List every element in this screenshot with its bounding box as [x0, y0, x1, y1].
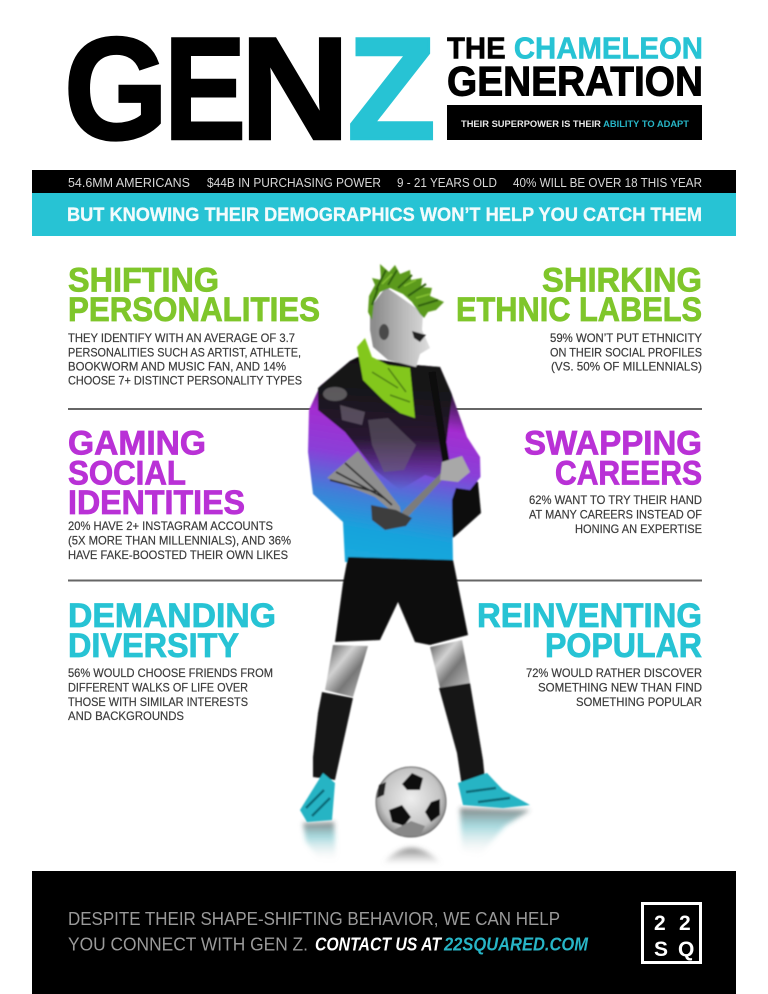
torso and sleeves	[308, 357, 480, 562]
illustration: teen with book and soccer ball	[300, 264, 530, 864]
open book	[327, 451, 456, 520]
panel: shifting personalities: SHIFTING	[68, 262, 219, 300]
panel: shifting personalities	[68, 262, 320, 388]
right shoe	[458, 773, 530, 808]
panel: shifting personalities: PERSONALITIES	[68, 291, 320, 329]
demographics stats bar: 54.6MM AMERICANS	[68, 176, 190, 190]
reflection on floor	[303, 808, 530, 864]
tagline box	[447, 105, 702, 140]
panel: swapping careers	[524, 424, 702, 536]
head	[370, 287, 430, 367]
panel: shirking ethnic labels: 59% WON’T PUT ETHNICITY	[550, 331, 702, 345]
wordmark letter N: N	[240, 7, 350, 170]
panel: demanding diversity: DEMANDING	[68, 597, 276, 635]
panel: shirking ethnic labels	[456, 262, 702, 374]
wordmark letter G: G	[64, 7, 168, 170]
shorts	[335, 557, 468, 645]
demographics stats bar: 40% WILL BE OVER 18 THIS YEAR	[513, 176, 702, 190]
hands	[371, 456, 470, 530]
wordmark letter Z: Z	[347, 7, 436, 170]
tagline box: THEIR SUPERPOWER IS THEIR ABILITY TO ADAPT	[461, 119, 689, 130]
logo: 22SQ: S	[654, 938, 668, 961]
panel: demanding diversity: DIFFERENT WALKS OF LIFE OVER	[68, 680, 248, 694]
panel: shifting personalities: CHOOSE 7+ DISTINCT PERSONALITY TYPES	[68, 374, 302, 388]
backpack	[440, 470, 481, 538]
left sock	[313, 692, 353, 780]
panel: reinventing popular: 72% WOULD RATHER DISCOVER	[526, 666, 702, 680]
footer message: DESPITE THEIR SHAPE-SHIFTING BEHAVIOR, WE CAN HELP	[68, 908, 560, 929]
panel: gaming social identities: HAVE FAKE-BOOSTED THEIR OWN LIKES	[68, 548, 288, 562]
panel: shifting personalities: PERSONALITIES SUCH AS ARTIST, ATHLETE,	[68, 346, 301, 360]
logo: 22SQ: 2	[679, 912, 691, 935]
panel: demanding diversity: DIVERSITY	[68, 627, 239, 665]
cyan banner	[32, 193, 736, 236]
panel: reinventing popular	[477, 597, 702, 709]
panel: gaming social identities: 20% HAVE 2+ INSTAGRAM ACCOUNTS	[68, 519, 273, 533]
soccer ball	[376, 767, 446, 837]
panel: gaming social identities: (5X MORE THAN MILLENNIALS), AND 36%	[68, 534, 291, 548]
panel: swapping careers: 62% WANT TO TRY THEIR HAND	[529, 493, 702, 507]
website: 22SQUARED.COM	[443, 934, 589, 954]
panel: shirking ethnic labels: ETHNIC LABELS	[456, 291, 702, 329]
panel: demanding diversity	[68, 597, 276, 723]
masthead: Gen Z title	[64, 7, 703, 170]
panel: shirking ethnic labels: ON THEIR SOCIAL PROFILES	[550, 346, 702, 360]
panel: shifting personalities: BOOKWORM AND MUSIC FAN, AND 14%	[68, 360, 286, 374]
cyan banner: BUT KNOWING THEIR DEMOGRAPHICS WON’T HELP YOU CATCH THEM	[67, 204, 702, 226]
logo: 22SQ: 2	[654, 912, 666, 935]
footer panel	[32, 871, 736, 994]
panel: swapping careers: SWAPPING	[524, 424, 702, 462]
contact call to action: CONTACT US AT	[315, 934, 442, 954]
panel: demanding diversity: AND BACKGROUNDS	[68, 709, 184, 723]
panel: shifting personalities: THEY IDENTIFY WITH AN AVERAGE OF 3.7	[68, 331, 295, 345]
panel: shirking ethnic labels: (VS. 50% OF MILLENNIALS)	[551, 360, 702, 374]
subtitle line 1: THE CHAMELEON	[447, 30, 703, 66]
right sock	[439, 683, 485, 787]
vest	[318, 357, 452, 490]
demographics stats bar: 9 - 21 YEARS OLD	[397, 176, 497, 190]
panel: demanding diversity: 56% WOULD CHOOSE FRIENDS FROM	[68, 666, 273, 680]
left knee	[325, 645, 368, 697]
panel: reinventing popular: REINVENTING	[477, 597, 702, 635]
panel: reinventing popular: POPULAR	[545, 627, 702, 665]
green mohawk	[368, 264, 444, 320]
panel: reinventing popular: SOMETHING POPULAR	[576, 695, 702, 709]
panel: shirking ethnic labels: SHIRKING	[542, 262, 702, 300]
left shoe	[300, 773, 335, 822]
demographics stats bar: $44B IN PURCHASING POWER	[207, 176, 381, 190]
panel: swapping careers: AT MANY CAREERS INSTEAD OF	[529, 508, 702, 522]
panel: reinventing popular: SOMETHING NEW THAN FIND	[538, 680, 702, 694]
demographics stats bar	[32, 170, 736, 193]
panel: gaming social identities: SOCIAL	[68, 454, 186, 492]
panel: swapping careers: HONING AN EXPERTISE	[575, 522, 702, 536]
panel: demanding diversity: THOSE WITH SIMILAR INTERESTS	[68, 695, 248, 709]
logo: 22SQ	[642, 904, 700, 962]
divider lines	[68, 408, 702, 410]
subtitle line 2: GENERATION	[447, 58, 703, 104]
logo: 22SQ: Q	[678, 938, 694, 961]
green scarf	[357, 338, 415, 418]
ear and eye	[379, 324, 426, 342]
wordmark letter E: E	[164, 7, 246, 170]
footer message second line: YOU CONNECT WITH GEN Z.	[68, 934, 308, 954]
panel: gaming social identities: IDENTITIES	[68, 484, 245, 522]
panel: swapping careers: CAREERS	[555, 454, 702, 492]
panel: gaming social identities: GAMING	[68, 424, 206, 462]
panel: gaming social identities	[68, 424, 291, 562]
right knee	[430, 640, 470, 688]
